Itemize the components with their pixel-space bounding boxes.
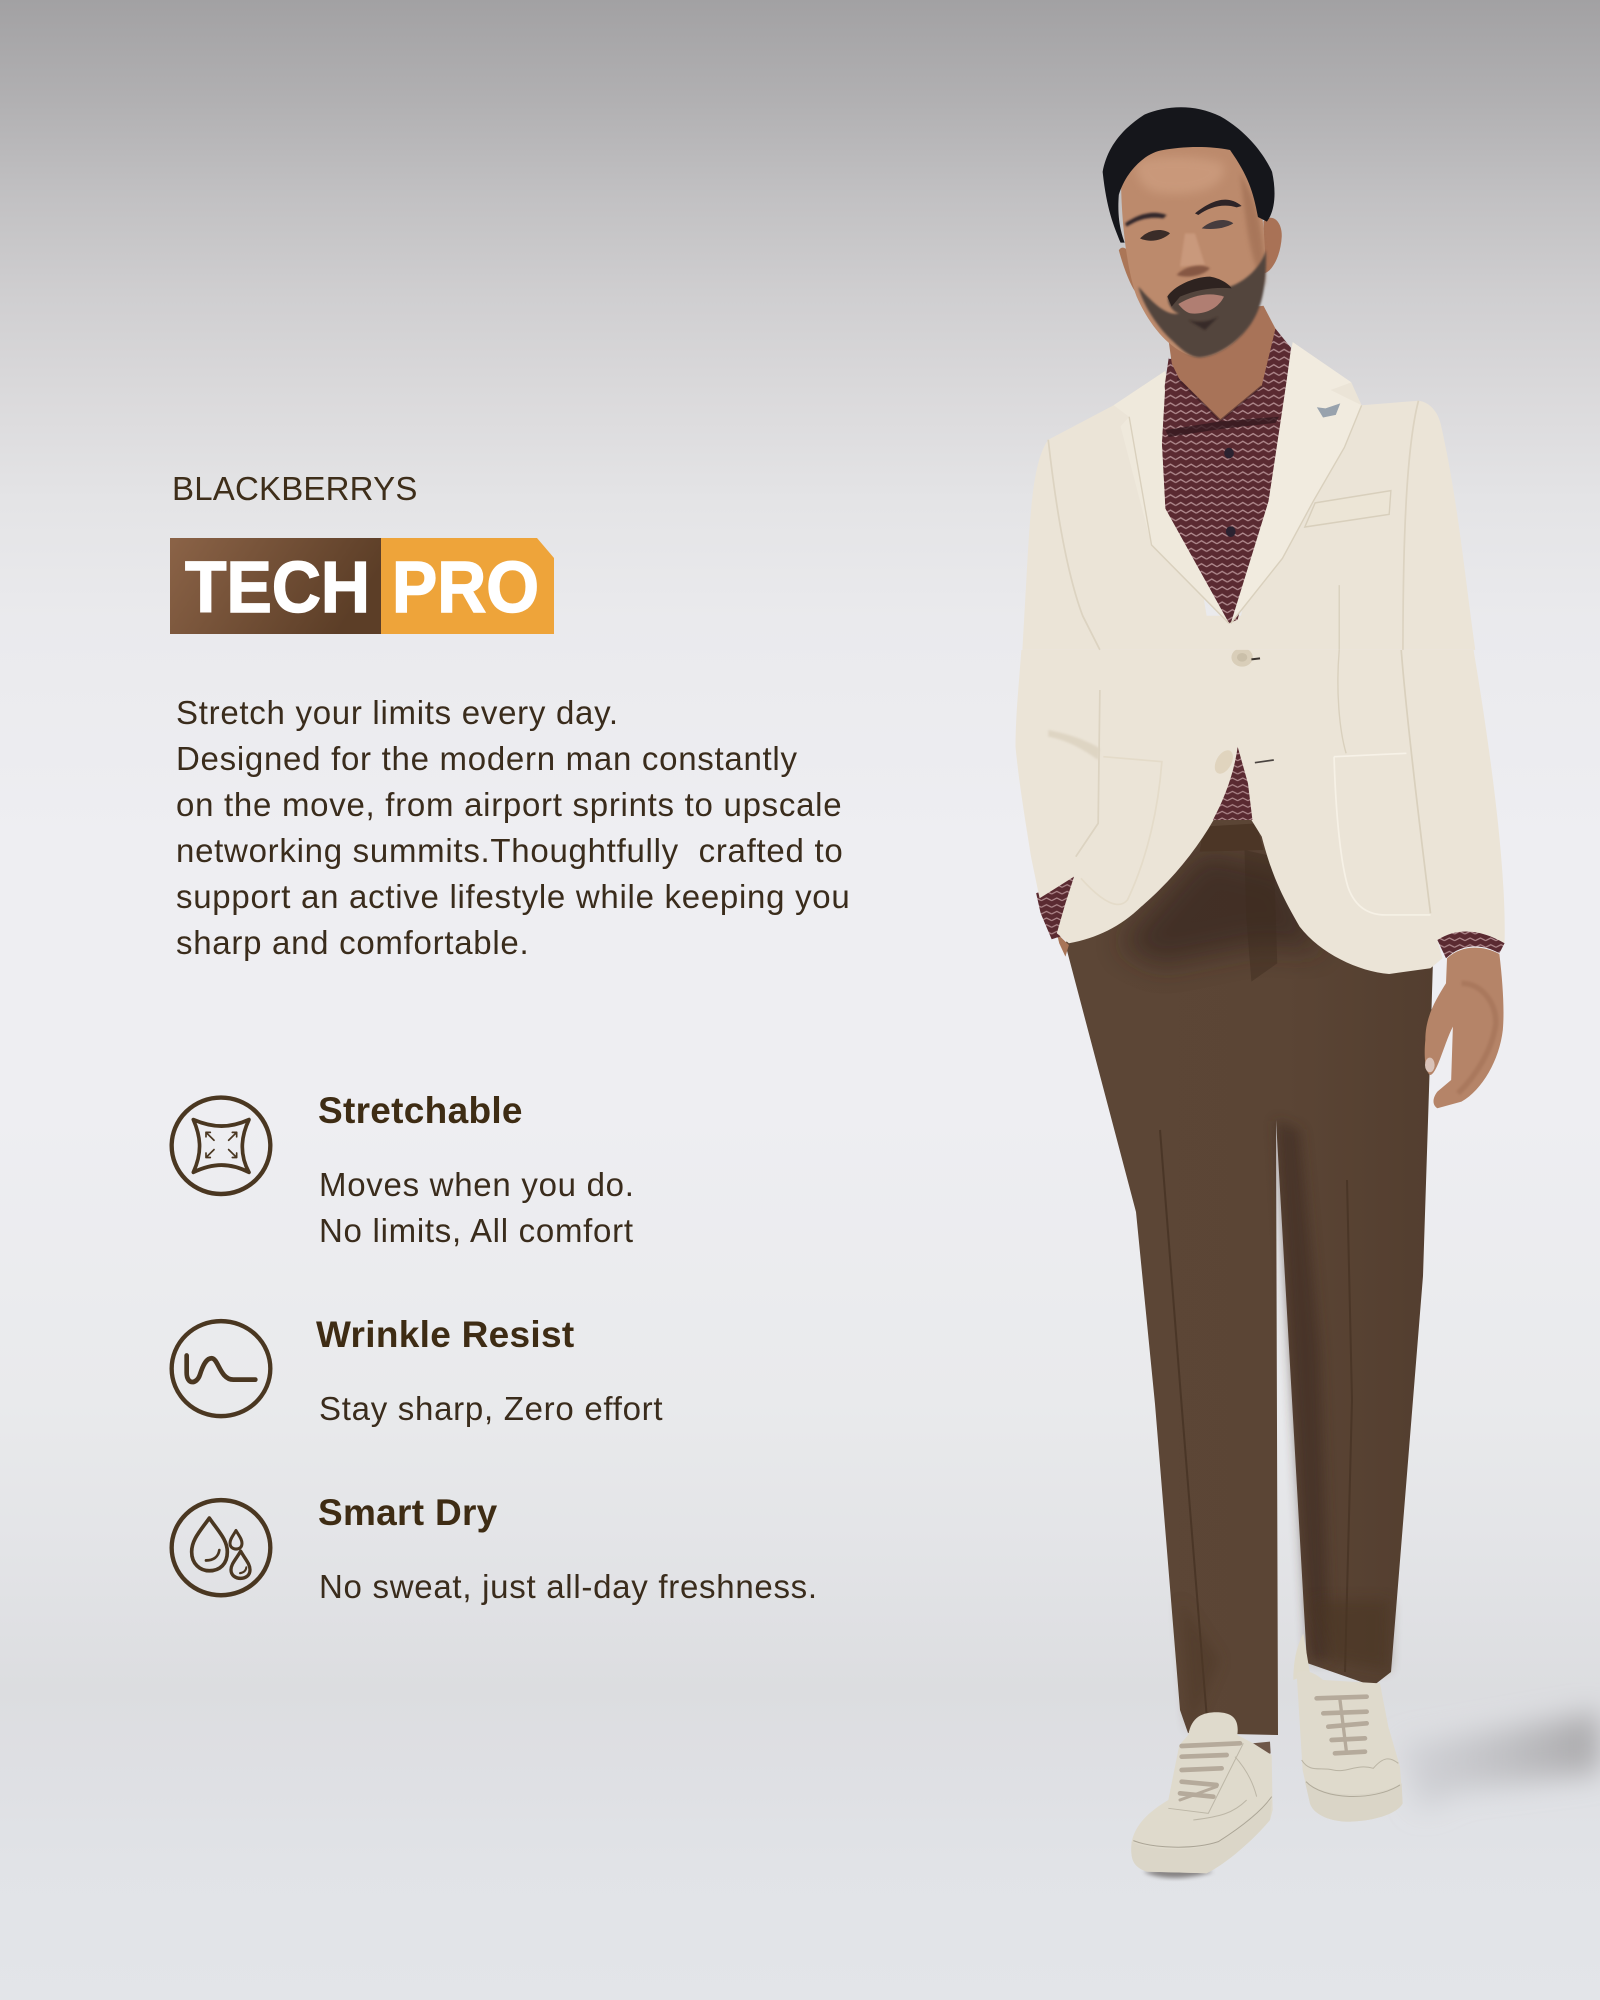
heading: Smart Dry: Smart Dry <box>318 1492 498 1533</box>
icon: stretchable <box>172 1098 270 1194</box>
left shoe <box>1131 1712 1273 1878</box>
text: stretchable body: Moves when you do. No limits, All comfort <box>319 1166 635 1249</box>
face <box>1121 140 1265 357</box>
eyes <box>1140 230 1170 241</box>
right shoe <box>1293 1633 1403 1822</box>
model figure <box>1015 107 1505 1878</box>
eyebrows <box>1125 213 1167 227</box>
neck <box>1165 306 1276 421</box>
lapel pin <box>1317 403 1340 418</box>
chest pocket <box>1305 491 1391 527</box>
brand name: BLACKBERRYS <box>172 470 418 507</box>
floor shadow <box>1400 1712 1600 1810</box>
icon: smart dry <box>172 1500 270 1595</box>
trousers <box>1065 815 1433 1735</box>
logo: tech pro badge: TECH <box>185 548 370 628</box>
lower shirt <box>1213 747 1252 820</box>
right shirt cuff <box>1437 931 1505 958</box>
ears <box>1119 248 1141 298</box>
moustache <box>1167 277 1232 307</box>
jacket buttons <box>1211 648 1274 777</box>
text: wrinkle resist body: Stay sharp, Zero effort <box>319 1390 663 1427</box>
heading: Wrinkle Resist: Wrinkle Resist <box>316 1314 575 1355</box>
logo: tech pro badge: PRO <box>392 548 539 628</box>
nose <box>1177 266 1210 277</box>
logo: tech pro badge <box>170 538 554 634</box>
pockets <box>1081 753 1430 915</box>
left lapel <box>1114 371 1229 623</box>
beard <box>1138 250 1266 357</box>
shirt collar <box>1165 329 1289 437</box>
hair <box>1103 107 1275 243</box>
lips <box>1178 294 1224 314</box>
shirt <box>1162 329 1291 623</box>
text: smart dry body: No sweat, just all-day freshness. <box>319 1568 818 1605</box>
head <box>1103 107 1282 357</box>
heading: Stretchable: Stretchable <box>318 1090 523 1131</box>
icon: wrinkle resist <box>172 1321 270 1416</box>
right hand <box>1425 948 1503 1108</box>
right lapel <box>1231 342 1362 623</box>
left shirt cuff and wrist <box>1036 873 1077 957</box>
jacket <box>1015 306 1505 1108</box>
intro paragraph: Stretch your limits every day. Designed for the modern man constantly on the move, from airport sprints to upscale networking summits.Thoughtfully crafted to support an active lifestyle while keeping you sharp and comfortable. <box>176 694 850 961</box>
